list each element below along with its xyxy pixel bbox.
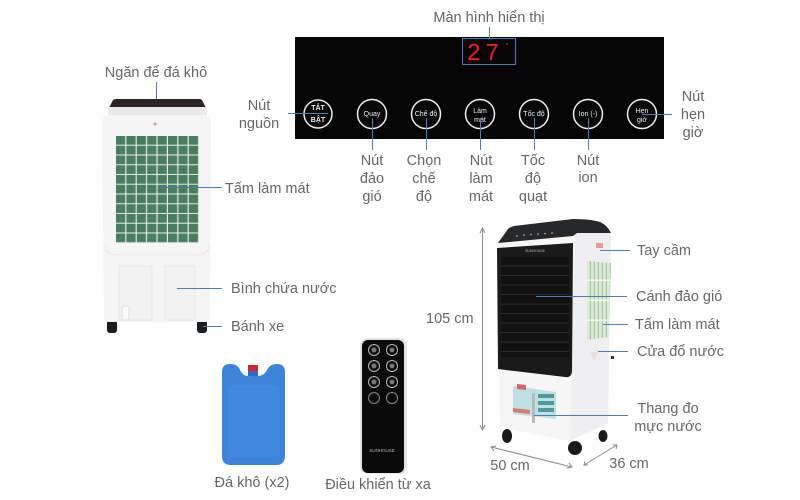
remote control (360, 338, 407, 474)
label: mode: chế (412, 171, 436, 187)
label: cool button: mát (469, 189, 493, 205)
label: swing button: Nút (361, 153, 383, 169)
button: timer: giờ (637, 117, 647, 124)
button: speed (520, 100, 548, 128)
button: swing: Quay (364, 111, 381, 118)
label: ion button: Nút (577, 153, 599, 169)
panel buttons (516, 232, 553, 237)
display readout: 27 (467, 41, 503, 68)
button: cool: mát (474, 117, 486, 124)
button: speed: Tốc độ (523, 109, 545, 118)
button: mode (412, 100, 440, 128)
label: cool button: Nút (470, 153, 492, 169)
label: height: 105 cm (426, 311, 474, 327)
right cooler (497, 219, 614, 455)
label: mode: độ (416, 189, 432, 205)
label: swing button: gió (362, 189, 382, 205)
dimension arrows (480, 228, 617, 468)
rear view cooler (102, 99, 211, 333)
label: timer button: hẹn (681, 107, 705, 123)
label: fan speed: Tốc (521, 153, 545, 169)
label: cool button: làm (469, 171, 493, 187)
ice pack (222, 364, 285, 465)
button: power (304, 100, 332, 128)
label: ion button: ion (578, 170, 598, 186)
label: water tank: Bình chứa nước (231, 281, 337, 297)
display readout (462, 38, 516, 68)
label: power button: Nút (248, 98, 270, 114)
label: ice packs: Đá khô (x2) (215, 475, 289, 491)
remote control: SUNHOUSE (369, 448, 395, 453)
label: swing louvers: Cánh đảo gió (636, 289, 722, 305)
label: ice compartment: Ngăn để đá khô (105, 65, 207, 81)
label: water gauge: mực nước (634, 419, 702, 435)
label: cooling pad rear: Tấm làm mát (225, 181, 310, 197)
label: remote: Điều khiển từ xa (325, 477, 432, 493)
button: mode: Chế độ (415, 109, 437, 118)
button: timer (628, 100, 656, 128)
label: handle: Tay cầm (637, 243, 691, 259)
label: timer button: giờ (683, 125, 704, 141)
button: ion (574, 100, 602, 128)
button: timer: Hẹn (636, 108, 649, 115)
control panel (295, 37, 664, 139)
display readout: ° (506, 42, 509, 50)
label: water gauge: Thang đo (637, 401, 699, 417)
label: width: 50 cm (490, 458, 530, 474)
label: wheels: Bánh xe (231, 319, 284, 335)
label: cooling pad side: Tấm làm mát (635, 317, 720, 333)
label: timer button: Nút (682, 89, 704, 105)
button: ion: Ion (-) (579, 111, 597, 118)
label: depth: 36 cm (609, 456, 649, 472)
label: swing button: đảo (360, 171, 384, 187)
button: cool (466, 100, 494, 128)
button: cool: Làm (473, 108, 487, 115)
button: swing (358, 100, 386, 128)
right cooler: SUNHOUSE (525, 249, 546, 253)
label: fan speed: quạt (519, 189, 547, 205)
label: mode: Chọn (407, 153, 441, 169)
label: power button: nguồn (239, 116, 279, 132)
label: water inlet: Cửa đổ nước (637, 344, 724, 360)
label: display: Màn hình hiển thị (433, 10, 545, 26)
leader lines (156, 27, 672, 416)
button: power: TẮT (311, 103, 326, 112)
button: power: BẬT (311, 115, 326, 124)
label: fan speed: độ (525, 171, 541, 187)
